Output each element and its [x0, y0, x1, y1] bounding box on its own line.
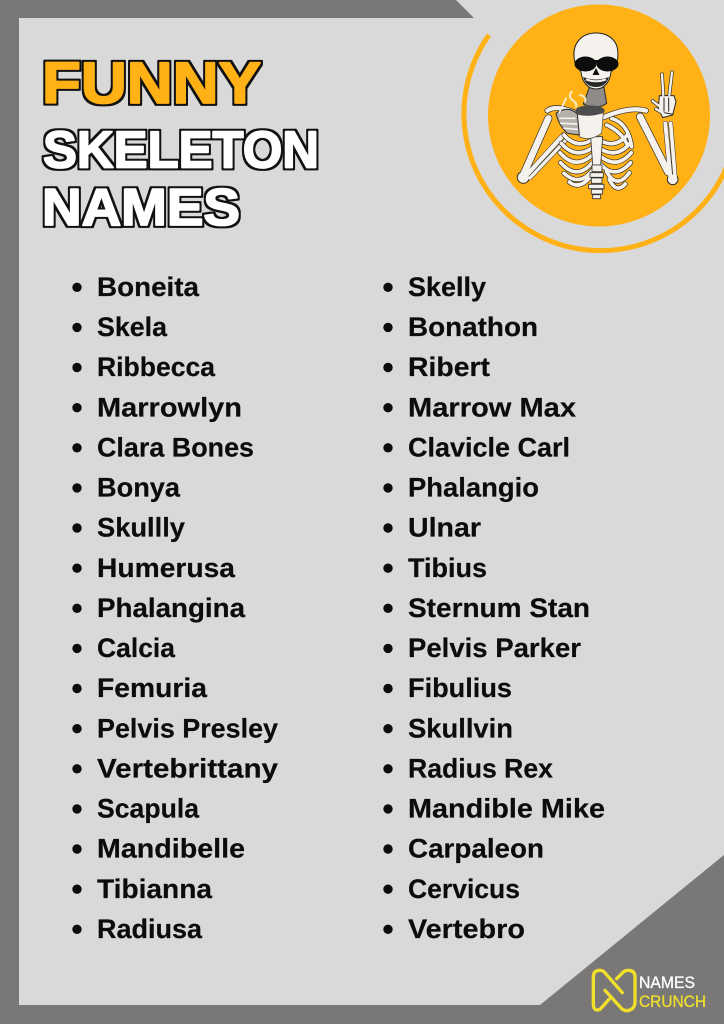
list: left column names: Clara Bones	[97, 432, 254, 462]
list: left column names: Phalangina	[97, 593, 246, 623]
list: left column bullets	[72, 283, 82, 934]
list: left column names: Tibianna	[97, 874, 213, 904]
heading: funny skeleton names	[42, 51, 319, 237]
left arm bones	[517, 118, 566, 183]
list: right column names: Phalangio	[408, 473, 539, 503]
list: right column names: Pelvis Parker	[408, 633, 581, 663]
peace sign hand	[653, 72, 676, 118]
list: left column names: Marrowlyn	[97, 392, 242, 422]
logo: names crunch	[593, 970, 706, 1011]
list: right column names	[408, 272, 605, 944]
clavicles and shoulders	[547, 108, 646, 117]
list: right column names: Bonathon	[408, 312, 538, 342]
list: right column names: Cervicus	[408, 874, 520, 904]
list: right column names: Radius Rex	[408, 754, 553, 784]
list: left column names: Pelvis Presley	[97, 713, 278, 743]
list: right column names: Marrow Max	[408, 392, 576, 422]
coffee mug	[575, 105, 605, 139]
list: right column names: Fibulius	[408, 673, 512, 703]
list: right column names: Clavicle Carl	[408, 432, 570, 462]
left hand holding mug	[556, 98, 579, 135]
list: right column names: Carpaleon	[408, 834, 544, 864]
icon: skeleton with coffee and peace sign	[517, 33, 678, 199]
rib cage	[560, 118, 632, 188]
icon: N logo mark	[593, 970, 635, 1011]
skull	[574, 33, 618, 89]
list: left column names: Skela	[97, 312, 168, 342]
teeth	[583, 77, 609, 87]
list: right column names: Skullvin	[408, 713, 513, 743]
heading: funny skeleton names: FUNNY	[42, 51, 261, 116]
list: left column names: Radiusa	[97, 914, 203, 944]
list: left column names: Boneita	[97, 272, 200, 302]
neck vertebrae	[583, 87, 607, 107]
list: right column names: Ulnar	[408, 513, 482, 543]
decorative ring arc	[464, 35, 724, 251]
list: left column names: Skullly	[97, 513, 185, 543]
list: left column names: Scapula	[97, 794, 200, 824]
right arm bones	[640, 117, 678, 185]
list: right column bullets	[383, 283, 393, 934]
list: right column names: Skelly	[408, 272, 486, 302]
list: right column names: Vertebro	[408, 914, 525, 944]
list: left column names: Bonya	[97, 473, 181, 503]
list: left column names: Mandibelle	[97, 834, 245, 864]
coffee steam	[570, 92, 585, 107]
list: left column names: Calcia	[97, 633, 176, 663]
sternum and spine	[589, 137, 604, 199]
orange circle	[488, 4, 710, 226]
list: right column names: Mandible Mike	[408, 794, 605, 824]
heading: funny skeleton names: SKELETON	[43, 122, 319, 180]
list: right column names: Ribert	[408, 352, 490, 382]
list: left column names: Femuria	[97, 673, 208, 703]
skeleton torso and arms	[517, 87, 678, 199]
list: right column names: Tibius	[408, 553, 487, 583]
sunglasses	[574, 56, 618, 72]
list: left column names	[97, 272, 278, 944]
heading: funny skeleton names: NAMES	[42, 179, 240, 237]
logo wordmark: NAMES	[639, 973, 695, 992]
list: right column names: Sternum Stan	[408, 593, 590, 623]
list: left column names: Ribbecca	[97, 352, 216, 382]
logo wordmark	[639, 973, 706, 1011]
list: left column names: Humerusa	[97, 553, 236, 583]
list: left column names: Vertebrittany	[97, 754, 278, 784]
nose	[592, 68, 600, 75]
logo wordmark: CRUNCH	[639, 992, 706, 1011]
